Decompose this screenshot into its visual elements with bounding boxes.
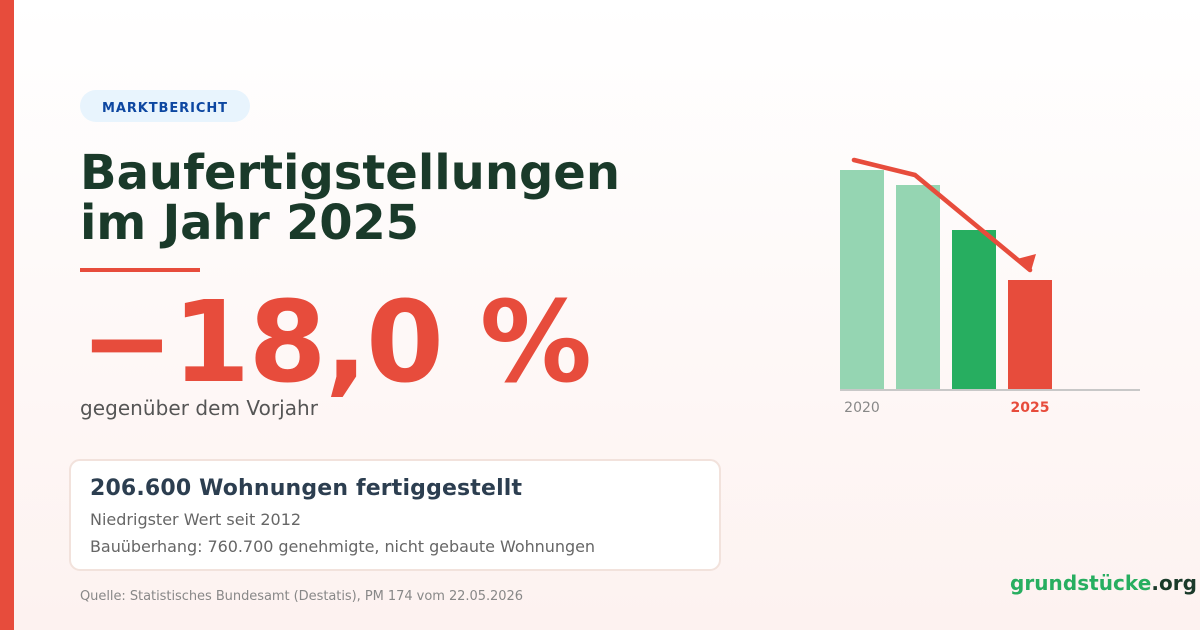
title: im Jahr 2025 [80, 195, 419, 251]
bar: second year [896, 185, 940, 390]
bar: 2020 [840, 170, 884, 390]
bar chart [840, 160, 1140, 416]
chart baseline [840, 389, 1140, 391]
accent bar [0, 0, 14, 630]
logo: grundstücke.org: grundstücke.org [1010, 571, 1197, 595]
bar: third year [952, 230, 996, 390]
key figure caption: gegenüber dem Vorjahr [80, 396, 319, 420]
badge: Marktbericht [80, 90, 250, 122]
panel: summary card [70, 460, 720, 570]
divider: title rule [80, 268, 200, 272]
source note: Quelle: Statistisches Bundesamt (Destatis), PM 174 vom 22.05.2026 [80, 589, 523, 604]
badge: Marktbericht: MARKTBERICHT [102, 101, 227, 116]
axis label: 2025: 2025 [1011, 400, 1049, 416]
title: Baufertigstellungen [80, 145, 620, 201]
arrow: downward trend [854, 160, 1036, 271]
axis label: 2020: 2020 [844, 400, 880, 416]
card line: lowest value: Niedrigster Wert seit 2012 [90, 510, 301, 529]
title [80, 145, 620, 251]
key figure: −18,0 % [80, 278, 592, 408]
card line: backlog: Bauüberhang: 760.700 genehmigte, nicht gebaute Wohnungen [90, 537, 595, 556]
card heading: 206.600 Wohnungen fertiggestellt [90, 476, 522, 501]
bar: 2025 [1008, 280, 1052, 390]
